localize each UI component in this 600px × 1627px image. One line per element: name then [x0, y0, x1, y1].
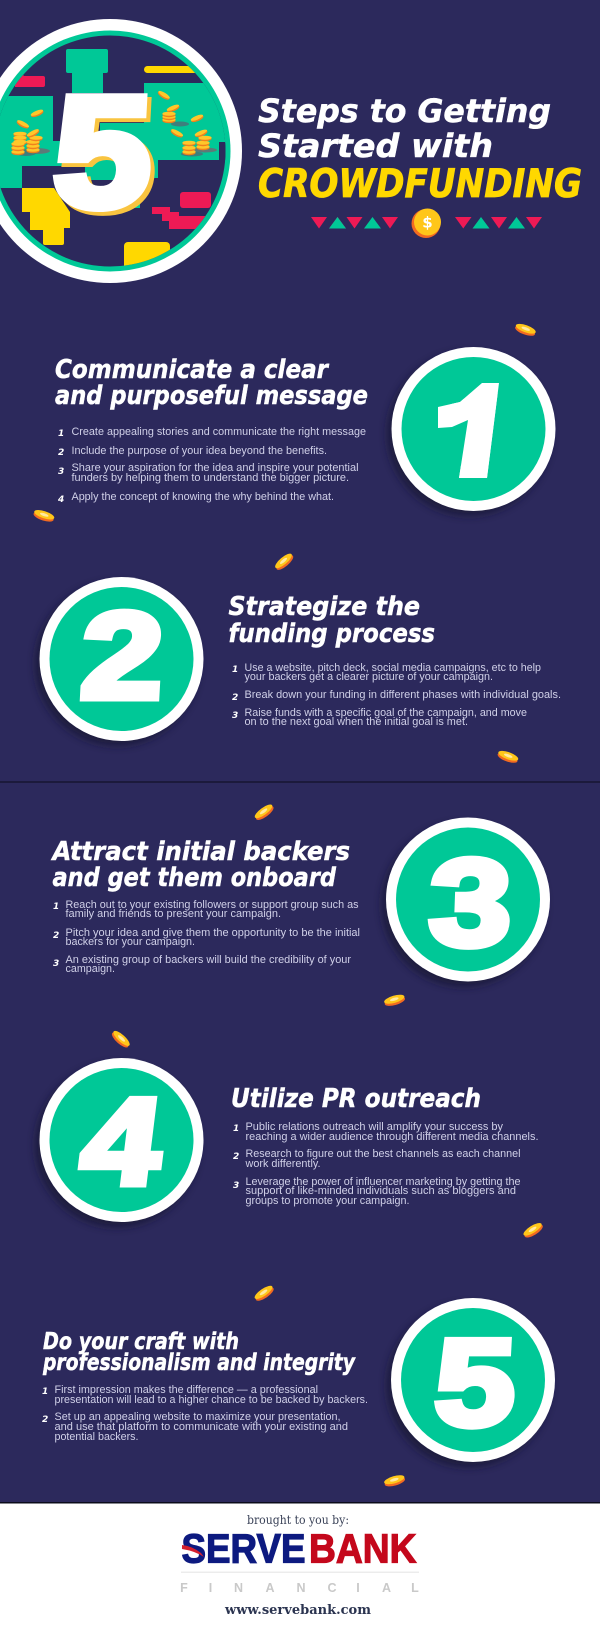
- step 3 badge: [382, 818, 550, 987]
- step 5 heading: Do your craft with: [43, 1329, 239, 1355]
- step 3 heading: [51, 837, 350, 893]
- step 5 panel: [42, 1298, 555, 1468]
- step 2 list: 2: [232, 693, 238, 703]
- step 3 heading: and get them onboard: [52, 863, 336, 893]
- step 4 heading: Utilize PR outreach: [231, 1084, 481, 1114]
- logo: Servebank Financial: FINANCIAL: [180, 1581, 419, 1595]
- icon: coin: [253, 1283, 276, 1303]
- step 3 list: Pitch your idea and give them the opportunity to be the initial: [66, 927, 360, 939]
- step 3 list: 3: [53, 959, 59, 969]
- step 5 list: and use that platform to communicate with your existing and: [54, 1421, 348, 1433]
- step 3 list: 2: [53, 931, 59, 941]
- step 5 list: 2: [42, 1415, 48, 1425]
- step 1 list: Include the purpose of your idea beyond the benefits.: [72, 445, 327, 457]
- step 4 badge: [35, 1058, 204, 1228]
- step 5 heading: professionalism and integrity: [42, 1350, 356, 1376]
- step 3 list: 1: [53, 902, 59, 912]
- step 2 list: your backers get a clearer picture of your campaign.: [244, 671, 493, 683]
- step 4 list: work differently.: [245, 1158, 320, 1170]
- icon: dollar coin: [412, 208, 441, 238]
- step 1 list: 2: [58, 448, 64, 458]
- step 1 badge: 1: [421, 368, 538, 505]
- step 4 list: 3: [233, 1181, 239, 1191]
- step 1 list: funders by helping them to understand the bigger picture.: [72, 472, 349, 484]
- step 1 list: Share your aspiration for the idea and inspire your potential: [72, 462, 358, 474]
- step 4 list: 2: [233, 1152, 239, 1162]
- step 4 list: reaching a wider audience through different media channels.: [246, 1131, 538, 1143]
- step 1 heading: [55, 355, 368, 411]
- step 3 heading: Attract initial backers: [51, 837, 350, 867]
- header hero badge: [0, 19, 242, 283]
- icon: coin: [32, 508, 55, 524]
- step 3 list: Reach out to your existing followers or support group such as: [66, 899, 359, 911]
- step 4 list: Public relations outreach will amplify your success by: [246, 1121, 503, 1133]
- step 2 heading: [228, 592, 435, 649]
- step 1 heading: Communicate a clear: [55, 355, 330, 385]
- step 4 badge: 4: [74, 1074, 170, 1211]
- icon: coins right: [157, 90, 217, 156]
- step 4 list: 1: [233, 1124, 239, 1134]
- step 5 heading: [42, 1329, 356, 1376]
- icon: dollar coin: $: [422, 214, 433, 232]
- step 1 list: [57, 426, 366, 505]
- step 1 list: 3: [58, 467, 64, 477]
- step 4 list: support of like-minded individuals such as bloggers and: [246, 1185, 516, 1197]
- logo: Servebank Financial: BANK: [309, 1526, 417, 1572]
- step 5 badge: [386, 1298, 555, 1468]
- section divider: [0, 782, 600, 783]
- step 3 panel: [51, 818, 550, 987]
- icon: coin: [522, 1221, 545, 1240]
- step 5 list: presentation will lead to a higher chance to be backed by backers.: [54, 1394, 368, 1406]
- step 1 panel: [55, 347, 556, 516]
- step 3 badge: 3: [427, 834, 514, 971]
- step 5 list: First impression makes the difference — a professional: [54, 1384, 318, 1396]
- icon: coin: [514, 322, 537, 338]
- big numeral 5: 5: [54, 68, 160, 244]
- step 1 list: 1: [58, 429, 64, 439]
- step 2 badge: 2: [78, 587, 167, 724]
- step 5 list: [42, 1384, 368, 1443]
- step 3 list: backers for your campaign.: [66, 936, 195, 948]
- step 2 list: Use a website, pitch deck, social media campaigns, etc to help: [244, 662, 541, 674]
- step 2 list: Raise funds with a specific goal of the campaign, and move: [244, 707, 527, 719]
- icon: coin: [383, 1473, 406, 1488]
- step 5 list: 1: [42, 1387, 48, 1397]
- step 1 badge: [387, 347, 556, 516]
- step 2 list: on to the next goal when the initial goal is met.: [244, 716, 468, 728]
- step 2 list: Break down your funding in different phases with individual goals.: [244, 689, 561, 701]
- icon: coin: [253, 802, 275, 822]
- footer: website: www.servebank.com: [224, 1603, 371, 1618]
- step 1 list: Create appealing stories and communicate the right message: [72, 426, 366, 438]
- title: Started with: [258, 127, 493, 165]
- big numeral 5: 5: [50, 64, 156, 240]
- icon: coin: [273, 551, 295, 572]
- step 2 list: 3: [232, 711, 238, 721]
- step 2 list: [232, 662, 561, 728]
- title: [258, 92, 582, 207]
- logo: Servebank Financial: SERVE: [182, 1526, 306, 1572]
- step 2 list: 1: [232, 665, 238, 675]
- step 2 badge: [35, 577, 204, 746]
- step 1 heading: and purposeful message: [55, 381, 368, 411]
- decorative triangles and dollar coin: [311, 208, 542, 238]
- step 5 list: potential backers.: [54, 1431, 138, 1443]
- step 4 list: [233, 1121, 538, 1207]
- step 4 list: Research to figure out the best channels as each channel: [246, 1148, 520, 1160]
- step 2 heading: Strategize the: [228, 592, 420, 622]
- step 3 list: [53, 899, 360, 975]
- icon: coin: [383, 993, 406, 1008]
- step 2 heading: funding process: [228, 619, 435, 649]
- icon: coin: [496, 749, 519, 765]
- step 3 list: family and friends to present your campaign.: [66, 908, 281, 920]
- step 5 list: Set up an appealing website to maximize your presentation,: [54, 1411, 340, 1423]
- step 4 list: Leverage the power of influencer marketing by getting the: [246, 1176, 520, 1188]
- title: Steps to Getting: [258, 92, 551, 130]
- step 3 list: campaign.: [66, 963, 115, 975]
- footer panel: [0, 1502, 600, 1627]
- icon: coin: [110, 1029, 132, 1050]
- step 3 list: An existing group of backers will build the credibility of your: [66, 954, 351, 966]
- step 1 list: Apply the concept of knowing the why behind the what.: [72, 491, 334, 503]
- step 1 list: 4: [57, 495, 64, 505]
- step 4 list: groups to promote your campaign.: [246, 1195, 410, 1207]
- footer: brought to you by: brought to you by:: [247, 1513, 349, 1527]
- step 2 panel: [35, 577, 561, 746]
- step 5 badge: 5: [432, 1315, 519, 1452]
- logo: Servebank Financial: [180, 1526, 419, 1595]
- step 4 panel: [35, 1058, 538, 1228]
- icon: coins left: [11, 108, 50, 156]
